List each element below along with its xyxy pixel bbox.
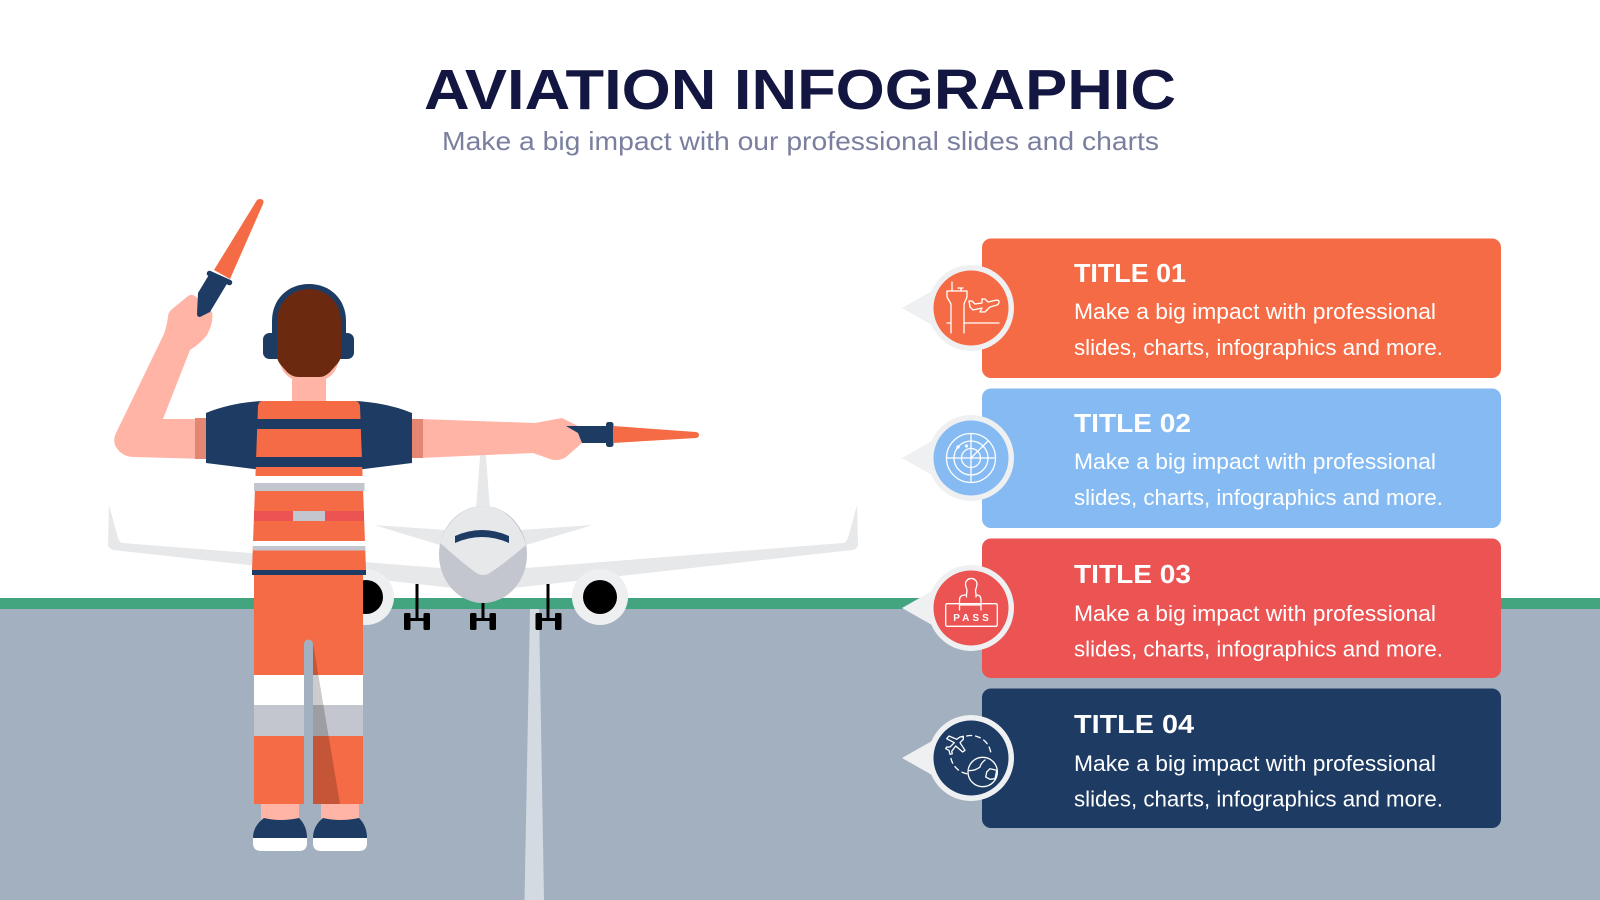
card text 01: TITLE 01 [1074, 258, 1186, 288]
raised arm [114, 295, 212, 459]
airplane [108, 417, 858, 630]
card text 03: Make a big impact with professional [1074, 601, 1436, 626]
hair [277, 289, 341, 377]
card text 03 [1074, 559, 1443, 662]
card text 02 [1074, 408, 1443, 510]
plane windshield [455, 530, 509, 543]
card text 03: TITLE 03 [1074, 559, 1191, 589]
extended arm [420, 418, 582, 460]
card text 04: slides, charts, infographics and more. [1074, 786, 1443, 812]
right shoe [313, 818, 367, 851]
raised arm cuff [195, 418, 206, 459]
badge pointer 03 [902, 591, 932, 625]
card text 04 [1074, 709, 1443, 812]
plane fuselage [439, 506, 527, 603]
panel: title 03 [902, 538, 1501, 678]
badge 02 [928, 415, 1014, 501]
marshaller figure [114, 199, 699, 851]
headset [263, 284, 354, 359]
card text 04: TITLE 04 [1074, 709, 1195, 739]
badge pointer 01 [902, 291, 932, 325]
plane left engine [338, 569, 394, 625]
safety vest [252, 401, 366, 575]
card background 01 [982, 238, 1501, 378]
card background 04 [982, 688, 1501, 828]
raised baton [197, 199, 264, 317]
icon: pass stamp: PASS [953, 613, 992, 624]
landing gear [404, 584, 562, 630]
panel: title 01 [902, 238, 1501, 378]
card text 02: Make a big impact with professional [1074, 449, 1436, 474]
icon: control tower and plane [947, 282, 999, 333]
ankles [261, 804, 359, 824]
plane tail fin [476, 417, 490, 510]
card background 02 [982, 388, 1501, 528]
plane right engine [572, 569, 628, 625]
card text 03: slides, charts, infographics and more. [1074, 636, 1443, 662]
card text 01 [1074, 258, 1443, 360]
panel: title 02 [902, 388, 1501, 528]
ground: grass strip and apron [0, 598, 1600, 900]
icon: radar [946, 434, 996, 482]
extended baton [566, 422, 699, 447]
icon: pass stamp [946, 578, 997, 626]
subtitle: Make a big impact with our professional slides and charts [442, 126, 1159, 156]
title: AVIATION INFOGRAPHIC [424, 58, 1176, 122]
card background 03 [982, 538, 1501, 678]
card text 01: Make a big impact with professional [1074, 299, 1436, 324]
badge 01 [928, 265, 1014, 351]
runway centre line [524, 609, 544, 900]
card text 04: Make a big impact with professional [1074, 751, 1436, 776]
plane tailplanes [374, 525, 593, 545]
badge pointer 04 [902, 741, 932, 775]
card text 02: TITLE 02 [1074, 408, 1191, 438]
trousers [254, 570, 363, 804]
right sleeve [356, 401, 412, 470]
face skin [279, 352, 339, 382]
left shoe [253, 818, 307, 851]
badge pointer 02 [902, 441, 932, 475]
icon: globe and flight path [946, 736, 997, 787]
badge 03 [928, 565, 1014, 651]
panel: title 04 [902, 688, 1501, 828]
plane wings [108, 505, 858, 588]
card text 02: slides, charts, infographics and more. [1074, 485, 1443, 510]
card text 01: slides, charts, infographics and more. [1074, 335, 1443, 360]
badge 04 [928, 715, 1014, 801]
extended arm cuff [412, 419, 423, 458]
left sleeve [206, 401, 262, 470]
neck [292, 372, 326, 404]
plane nose upper [440, 506, 526, 575]
